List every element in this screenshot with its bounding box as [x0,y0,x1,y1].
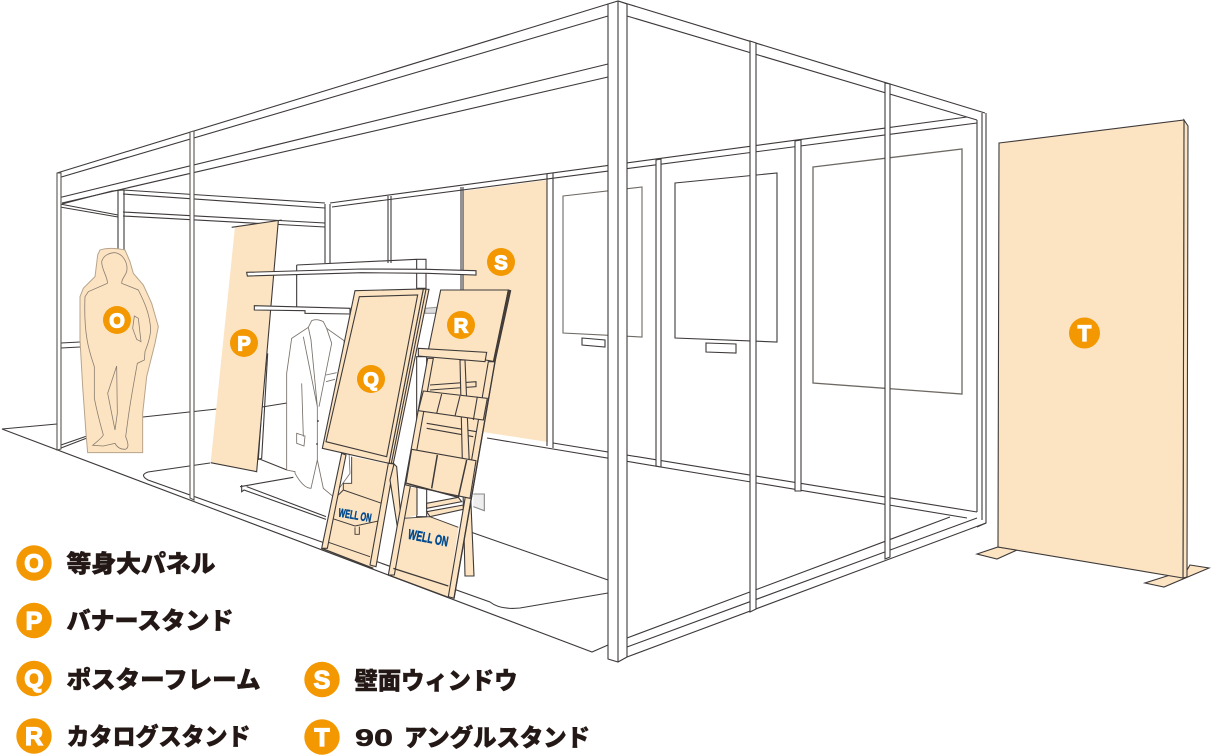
rear floor lines [61,342,608,580]
frame depth [389,289,429,463]
panel S: wall window [463,180,548,442]
lower panel [322,457,388,568]
back-left beams [60,190,325,227]
marker P: P [237,334,251,356]
marker O [103,306,131,334]
logo on poster frame: WELL ON [337,506,373,525]
legend item O [16,545,215,581]
marker P [230,329,258,357]
jacket buttons [316,421,319,444]
beige rack column [404,487,417,518]
right foot [1145,565,1209,587]
poster [326,295,418,457]
legend item S: S [314,666,330,694]
banner edges [211,220,282,472]
stand poles [257,353,268,460]
back post 656 [656,159,661,467]
lower bar two [427,505,463,517]
legend item P: バナースタンド [66,608,234,635]
board [428,290,508,362]
rear cross bars [427,382,477,437]
main corner post [608,1,627,662]
left wall mid post [190,131,194,500]
frame [322,289,423,463]
jacket [287,320,350,497]
bottom rails [388,568,448,597]
marker R: R [454,316,469,338]
front posts [57,1,890,662]
bottom rail [322,548,373,568]
front post 2 [750,41,756,612]
marker O: O [109,310,125,332]
lower pockets [406,449,476,498]
legend item R: R [25,723,43,751]
floor outline [2,424,608,652]
legend item Q: ポスターフレーム [66,667,260,694]
handle 2 [706,343,736,353]
jacket details [297,327,337,460]
marker S: S [494,252,508,274]
back wall beams [330,117,977,207]
marker R [447,311,475,339]
lower shelf [327,457,383,557]
left corner post [57,173,61,450]
legend item O: 等身大パネル [66,550,216,578]
legend item T: 90 [355,725,393,752]
left leg [388,358,433,575]
lower shelf [254,306,350,314]
back post 795 [795,140,801,491]
panel R: catalog stand [388,290,511,598]
legend item R: カタログスタンド [66,723,250,751]
legend item T [304,719,590,755]
legend item T: T [314,724,330,752]
handle 1 [582,338,605,347]
legend item Q: Q [24,666,44,694]
lower bar one [427,497,462,508]
floor carpet rounded area [144,463,608,608]
back wall floor rails [487,438,977,518]
rear leg [390,464,403,548]
top ledge [418,348,487,362]
panel T: 90 angle stand [977,120,1209,587]
rack top and post [297,259,426,307]
marker T [1069,318,1100,348]
left leg [322,453,346,548]
right floor rails [627,517,986,657]
window 3 [813,149,962,394]
marker S [487,248,515,276]
left foot [977,547,1017,559]
legend item S: 壁面ウィンドウ [354,668,518,695]
rack post behind stand [417,357,427,517]
rack base [240,477,355,529]
banner [211,221,278,472]
panel Q: poster frame [322,289,429,568]
right wall beams [618,1,985,120]
figure outline [85,253,151,449]
bottom panel [388,517,458,597]
rear legs [460,360,474,576]
legend item P: P [26,608,42,636]
legend item R [16,718,250,754]
legend item T: アングルスタンド [404,724,590,752]
panel face [998,120,1184,578]
side edge [493,290,511,362]
upper shelf [247,269,476,276]
legend item S [304,662,518,697]
legend item O: O [24,550,44,578]
left wall roof beams [57,4,608,203]
window 2 [675,173,777,342]
right leg [448,362,495,598]
right corner post [977,113,986,527]
grey support [473,494,484,511]
upper pockets [418,391,487,420]
panel O: life-size panel [80,248,158,453]
side edge [1183,120,1188,578]
marker Q [357,365,385,393]
front post 3 [885,83,890,559]
right leg [370,463,394,567]
back panel behind pockets [406,353,495,498]
silhouette board [80,248,158,453]
grey rail [425,307,437,313]
legend item P [16,603,233,638]
legend item Q [16,661,260,696]
logo on catalog stand: WELL ON [407,526,450,549]
marker T: T [1078,321,1092,346]
window 1 [563,187,642,337]
panel P: banner stand [211,220,282,472]
booth frame: back and floor structure [2,1,986,657]
marker Q: Q [363,370,379,392]
clothes rack and jacket [240,259,476,529]
back wall posts and windows [118,113,986,527]
